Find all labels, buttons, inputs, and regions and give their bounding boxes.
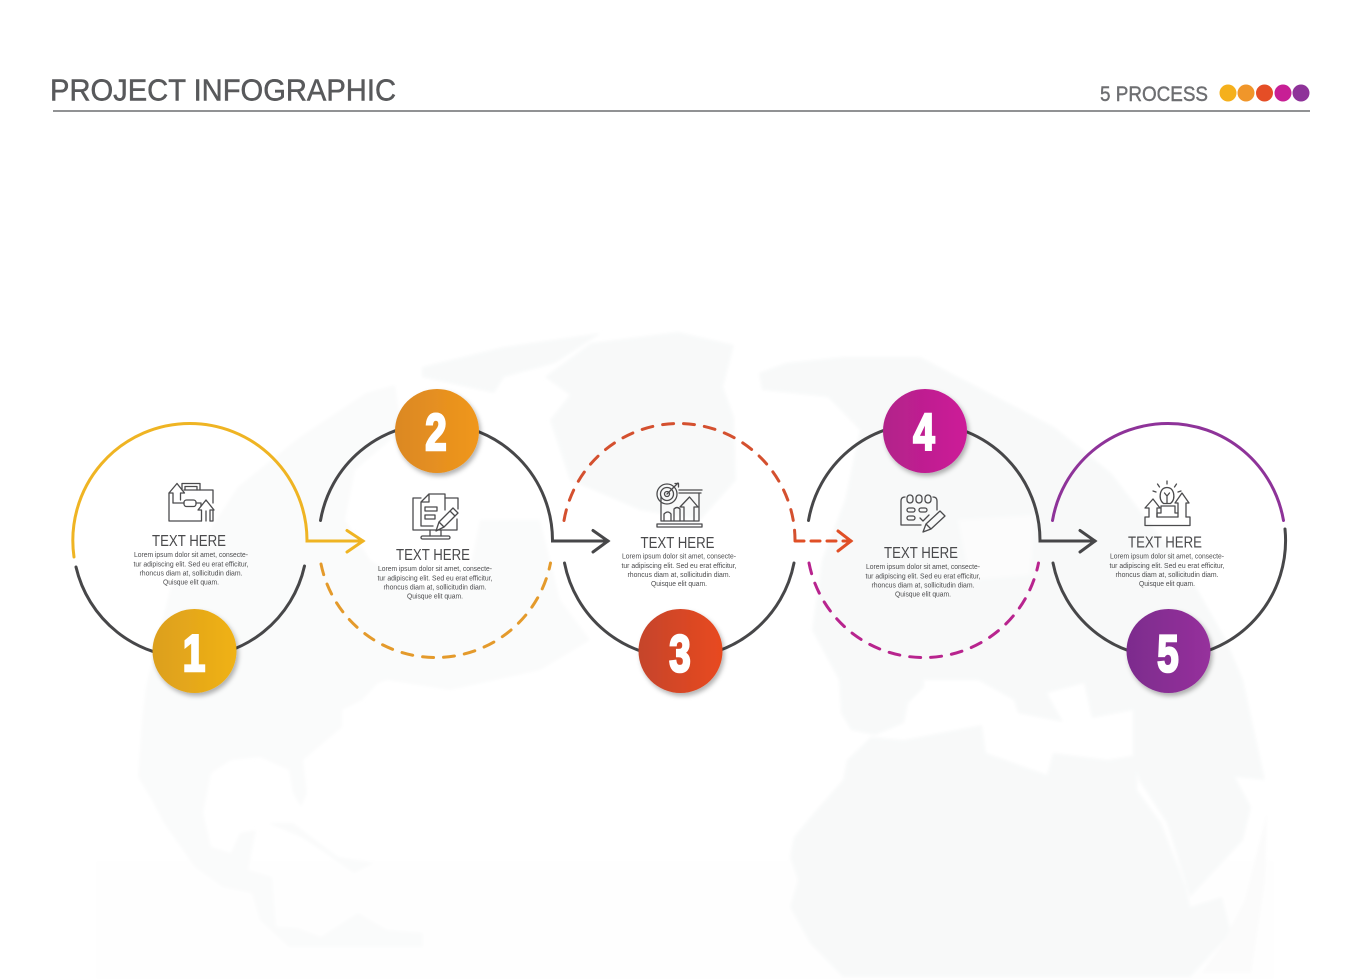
step 3 text: rhoncus diam at, sollicitudin diam. [628,572,731,579]
icon: target and growth chart [657,483,702,527]
badge 1: 1 [183,624,205,682]
step 4 text: Lorem ipsum dolor sit amet, consecte- [866,564,980,571]
step 2 text [378,547,493,600]
step 1 text: Quisque elit quam. [163,580,219,586]
step 3 text [622,535,737,588]
step 1 text: TEXT HERE [152,533,226,550]
badge 4: 4 [913,403,935,461]
step 2 text: rhoncus diam at, sollicitudin diam. [384,584,487,592]
step 3 text: Quisque elit quam. [651,581,707,588]
step 4 text: tur adipiscing elit. Sed eu erat efficitur, [866,574,981,580]
step 1 text: Lorem ipsum dolor sit amet, consecte- [134,552,248,559]
step 5 text: TEXT HERE [1128,534,1202,552]
badge 2: 2 [425,403,447,461]
step 5 text: rhoncus diam at, sollicitudin diam. [1116,572,1219,579]
step 2 text: Quisque elit quam. [407,594,463,600]
badge 4 [883,389,967,473]
icon: lightbulb on podium with arrows [1145,481,1190,526]
title: PROJECT INFOGRAPHIC [50,72,396,108]
step 4 text: TEXT HERE [884,545,958,562]
badge 2 [395,389,479,473]
step 1 text: rhoncus diam at, sollicitudin diam. [140,570,243,578]
step 4 text: Quisque elit quam. [895,592,951,598]
step 5 text [1110,534,1225,588]
step 5 text: Quisque elit quam. [1139,581,1195,588]
icon: calendar checklist with pencil [901,495,945,532]
step 4 text: rhoncus diam at, sollicitudin diam. [872,582,975,590]
badge 5: 5 [1157,625,1179,683]
step 3 ring and arrow [564,423,851,658]
step 1 text: tur adipiscing elit. Sed eu erat efficitur, [134,562,249,568]
world map background [95,332,1275,980]
step 1 ring and arrow [73,423,363,658]
step 3 text: tur adipiscing elit. Sed eu erat efficitur, [622,563,737,570]
step 2 ring and arrow [320,423,608,658]
icon: document on monitor with pen [413,494,458,539]
step 4 ring and arrow [808,423,1095,658]
step 4 text [866,545,981,598]
process label: 5 PROCESS [1100,83,1208,106]
step 5 text: tur adipiscing elit. Sed eu erat efficitur, [1110,563,1225,570]
badge 3: 3 [669,625,691,683]
step 3 text: Lorem ipsum dolor sit amet, consecte- [622,554,736,560]
step 2 text: tur adipiscing elit. Sed eu erat efficitur, [378,576,493,582]
step 1 text [134,533,249,586]
icon: briefcase with arrows [169,484,214,521]
badge 5 [1126,609,1210,693]
badge 1 [152,609,236,693]
step 3 text: TEXT HERE [640,535,714,552]
badge 3 [638,609,722,693]
step 2 text: Lorem ipsum dolor sit amet, consecte- [378,566,492,573]
step 5 text: Lorem ipsum dolor sit amet, consecte- [1110,554,1224,560]
process colour dots [1220,84,1310,102]
step 5 ring [1052,423,1286,658]
step 2 text: TEXT HERE [396,547,470,564]
